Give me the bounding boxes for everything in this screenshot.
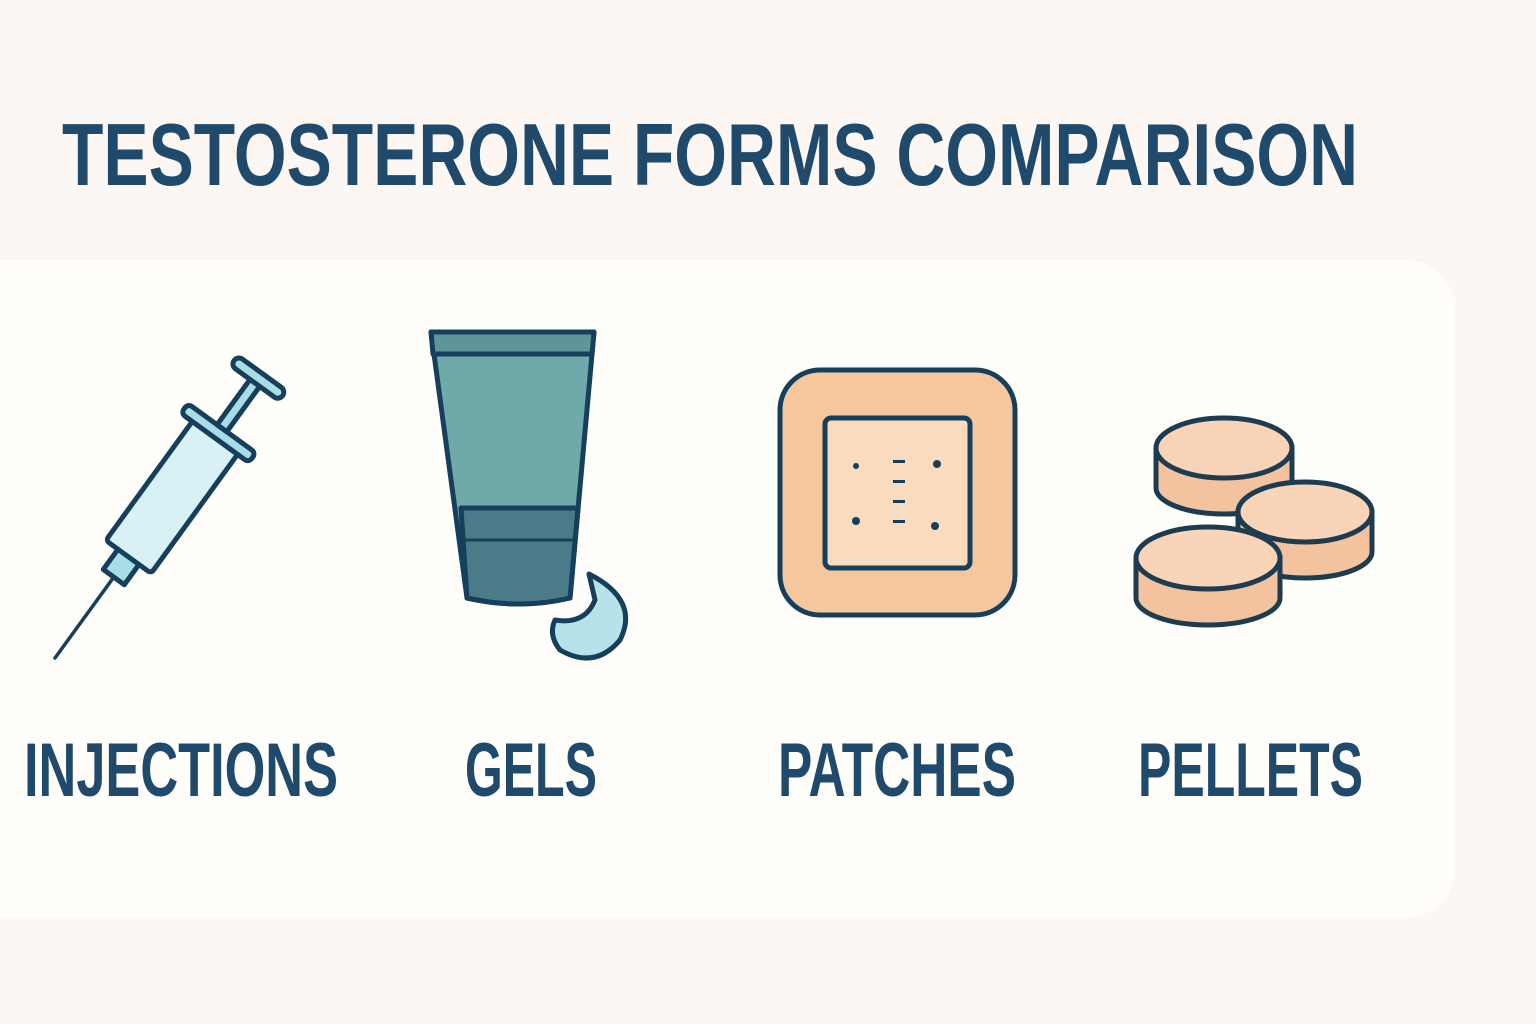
icon: syringe: [21, 349, 296, 683]
label: pellets: PELLETS: [1138, 728, 1363, 813]
label: injections: INJECTIONS: [24, 728, 338, 813]
panel: forms: [0, 260, 1455, 918]
icon: gel tube: [431, 332, 626, 658]
icon: pellets: [1136, 418, 1372, 625]
label: gels: GELS: [465, 728, 597, 813]
label: patches: PATCHES: [778, 728, 1016, 813]
icon: patch: [780, 370, 1015, 615]
